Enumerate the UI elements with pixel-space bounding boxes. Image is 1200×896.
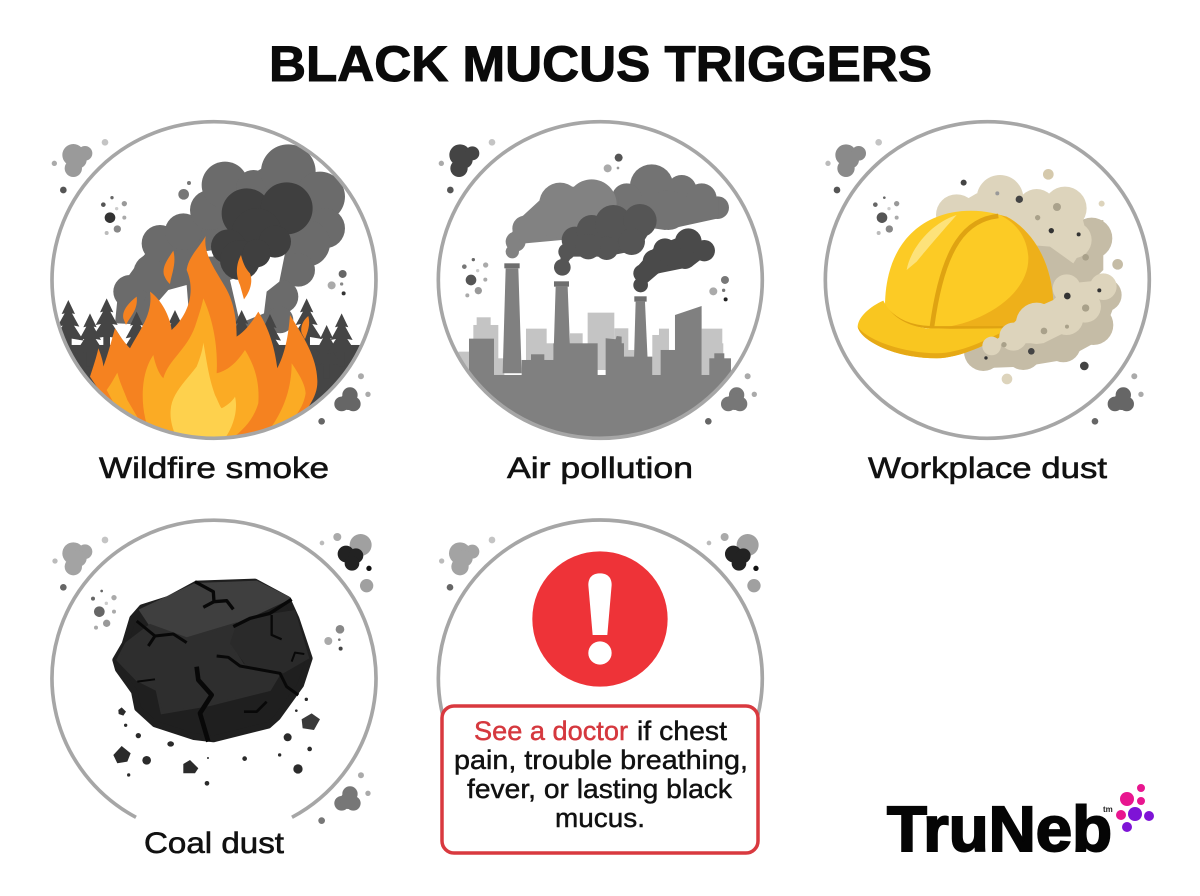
smoke: left plume bbox=[506, 179, 617, 258]
coal middle facet bbox=[117, 623, 280, 713]
trademark: tm bbox=[1103, 805, 1113, 814]
flames inner bbox=[171, 343, 236, 438]
coal upper facet bbox=[140, 582, 290, 638]
label: Coal dust bbox=[144, 827, 285, 860]
coal fragments bbox=[113, 698, 312, 786]
callout box bbox=[442, 706, 758, 853]
dust cloud: upper bbox=[936, 175, 1092, 263]
floating particles bbox=[52, 139, 371, 425]
circle outline bbox=[52, 122, 376, 438]
label: Wildfire smoke bbox=[99, 452, 329, 485]
icon: exclamation bbox=[532, 551, 668, 687]
panel: workplace dust bbox=[825, 122, 1149, 485]
hard hat bbox=[858, 211, 1053, 358]
dust specks bbox=[984, 191, 1101, 360]
smoke plume bbox=[113, 144, 345, 333]
illustration: factories bbox=[435, 122, 762, 445]
dark smoke bbox=[211, 182, 313, 280]
panel: wildfire smoke bbox=[50, 122, 376, 485]
wordmark: TruNeb bbox=[887, 793, 1112, 865]
clipped scene bbox=[50, 144, 370, 442]
logo: TruNeb bbox=[887, 784, 1154, 865]
illustration: warning bbox=[438, 520, 762, 837]
label: Air pollution bbox=[507, 452, 693, 485]
title: BLACK MUCUS TRIGGERS bbox=[269, 36, 932, 92]
panel: coal dust bbox=[52, 520, 376, 860]
chimney caps bbox=[504, 263, 647, 302]
floating particles bbox=[439, 139, 757, 425]
circle outline bbox=[438, 122, 762, 438]
city skyline bbox=[458, 263, 731, 436]
circle outline bbox=[825, 122, 1149, 438]
callout text: if chest bbox=[637, 716, 728, 746]
flames outer bbox=[90, 236, 317, 440]
callout text bbox=[454, 716, 748, 833]
foreground buildings and chimneys bbox=[469, 268, 731, 436]
molecule icon bbox=[1116, 784, 1154, 832]
dust cloud: front bbox=[982, 273, 1117, 355]
broken circle outline bbox=[52, 520, 376, 817]
dust cloud: shaded back bbox=[963, 218, 1122, 371]
smoke: right cloud bbox=[612, 164, 729, 230]
callout text: pain, trouble breathing, bbox=[454, 745, 748, 775]
smoke: right plume bbox=[633, 228, 715, 292]
coal right facet bbox=[230, 610, 309, 673]
floating particles bbox=[825, 139, 1144, 425]
floating particles bbox=[52, 533, 373, 824]
label: Workplace dust bbox=[868, 452, 1108, 485]
illustration: coal lump bbox=[52, 520, 376, 824]
white gaps in smoke bbox=[157, 250, 285, 327]
flames mid bbox=[107, 298, 306, 440]
coal cracks bbox=[137, 582, 304, 742]
circle outline bbox=[438, 520, 762, 837]
floating particles bbox=[439, 533, 761, 592]
flying embers bbox=[123, 251, 309, 339]
illustration: hard hat in dust bbox=[825, 122, 1149, 438]
smoke: middle plume bbox=[554, 204, 657, 276]
panel: air pollution bbox=[435, 122, 762, 485]
callout text: mucus. bbox=[555, 803, 645, 833]
callout text: fever, or lasting black bbox=[467, 774, 733, 804]
forest silhouette bbox=[50, 298, 370, 442]
coal body bbox=[116, 582, 309, 739]
illustration: wildfire bbox=[50, 122, 376, 442]
background buildings bbox=[458, 312, 724, 375]
panel: see a doctor warning bbox=[438, 520, 762, 853]
callout text: See a doctor bbox=[474, 716, 628, 746]
